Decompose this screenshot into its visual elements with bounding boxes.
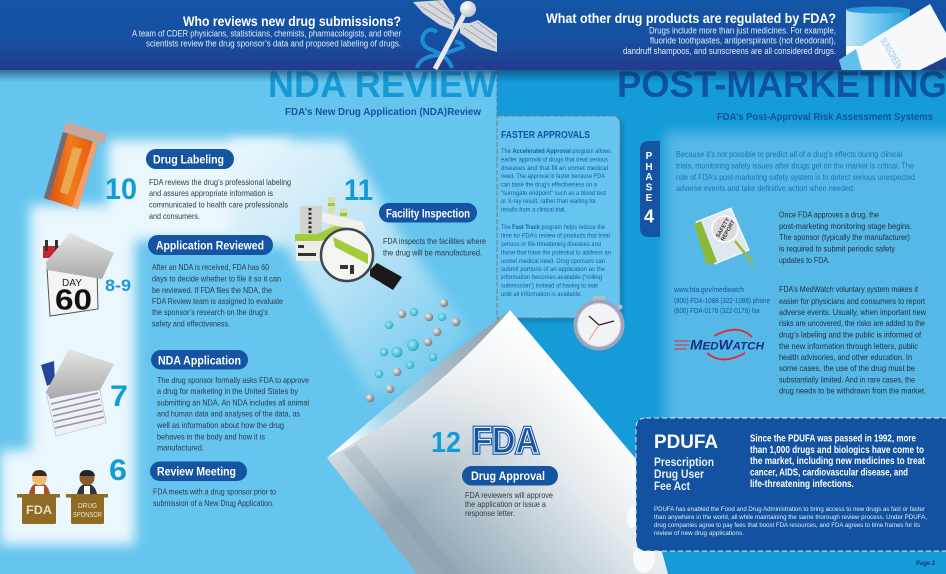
panel: post-marketing background (665, 132, 946, 432)
number 6: 6 (109, 454, 127, 487)
facility inspection text (383, 236, 486, 258)
PDUFA detail: review of new drug applications. (654, 530, 744, 537)
drug labeling pill (146, 149, 234, 169)
drug labeling text: FDA reviews the drug’s professional labeling (149, 177, 291, 187)
text: MedWatch description: easier for physicians and consumers to report (779, 296, 926, 306)
application reviewed text: the sponsor’s research on the drug’s (152, 307, 268, 317)
application reviewed text (152, 262, 283, 328)
drug approval text: FDA reviewers will approve (465, 490, 553, 500)
subheading: NDA review: FDA’s New Drug Application (NDA)Review (285, 107, 481, 118)
application reviewed text: safety and effectiveness. (152, 318, 230, 328)
PDUFA main statement: cancer, AIDS, cardiovascular disease, and (750, 468, 908, 478)
panel: faster approvals: time for FDA’s review of products that treat (501, 232, 610, 240)
icon: stopwatch (574, 296, 624, 350)
panel: faster approvals: submission”) instead of having to wait (501, 282, 598, 290)
icon: caduceus (413, 0, 497, 69)
panel: faster approvals: submit portions of an application as the (501, 266, 605, 273)
panel: faster approvals: those that have the potential to address an (501, 250, 611, 256)
icon: factory and magnifier (295, 197, 402, 290)
NDA application pill: NDA Application (158, 356, 241, 368)
panel: light beam (230, 140, 470, 395)
facility inspection text: the drug will be manufactured. (383, 248, 482, 258)
text: safety updates: Once FDA approves a drug, the (779, 210, 879, 220)
NDA application text (156, 375, 309, 452)
text: who reviews (132, 13, 401, 48)
application reviewed text: FDA Review team is assigned to evaluate (152, 296, 283, 306)
icon: day 60 calendar: 60 (55, 284, 92, 316)
text: MedWatch contact (673, 285, 770, 315)
text: page number: Page 2 (916, 560, 935, 567)
text: other products: dandruff shampoos, and sunscreens are all considered drugs. (623, 46, 836, 56)
section: phase 4 tab (640, 141, 660, 237)
application reviewed text: After an NDA is received, FDA has 60 (152, 262, 269, 272)
icon: FDA desk (17, 470, 60, 524)
review meeting text: submission of a New Drug Application. (153, 498, 274, 508)
NDA application text: behaves in the body and how it is (157, 432, 265, 442)
facility inspection pill: Facility Inspection (386, 208, 470, 220)
text: MedWatch description: the new information through letters, public (779, 341, 919, 351)
section: phase 4 tab: E (646, 193, 653, 204)
text: MedWatch description: health advisories, and other education. In (779, 352, 912, 362)
panel: faster approvals: FASTER APPROVALS (501, 129, 590, 141)
number 12: 12 (431, 427, 461, 459)
application reviewed pill (148, 235, 273, 255)
NDA application text: a drug for marketing in the United States by (157, 386, 299, 396)
section: step 11 facility inspection (295, 174, 486, 290)
icon: application form (41, 349, 114, 436)
drug labeling pill: Drug Labeling (153, 154, 224, 166)
heading: NDA REVIEW: NDA REVIEW (268, 64, 497, 105)
section: step 10 drug labeling (44, 122, 291, 221)
review meeting pill (150, 462, 247, 481)
PDUFA detail: than anywhere in the world, all while maintaining the same thorough review process. Under PDUFA, (654, 514, 927, 521)
section: phase 4 tab: 4 (644, 206, 654, 226)
drug approval text: response letter. (465, 508, 515, 518)
drug approval pill: Drug Approval (471, 471, 545, 483)
PDUFA main statement (750, 434, 926, 490)
text: MedWatch description (779, 284, 927, 396)
drug labeling text (149, 177, 291, 221)
panel: faster approvals: can base the drug’s effectiveness on a (501, 182, 597, 188)
panel: faster approvals: serious or life-threatening diseases and (501, 241, 601, 248)
number 11: 11 (344, 174, 373, 207)
text: MedWatch description: drug’s labeling and the public is informed of (779, 330, 922, 340)
text: safety updates: is required to submit periodic safety (779, 244, 896, 254)
icon: safety report: SAFETY (715, 217, 731, 239)
drug labeling text: communicated to health care professionals (149, 200, 288, 210)
text: other products (546, 10, 836, 56)
text: MedWatch description: drug needs to be withdrawn from the market. (779, 386, 926, 396)
review meeting text (153, 486, 276, 508)
text: MedWatch contact: www.fda.gov/medwatch (673, 285, 744, 294)
text: who reviews: Who reviews new drug submissions? (183, 13, 401, 29)
NDA application pill (151, 350, 248, 370)
panel: faster approvals (497, 70, 623, 321)
text: MedWatch contact: (800) FDA-0178 (322-0178) fax (674, 306, 760, 315)
section: phase 4 tab: S (646, 182, 653, 194)
panel: faster approvals: information becomes available (“rolling (501, 274, 602, 281)
text: safety updates: post-marketing monitoring stage begins. (779, 221, 912, 231)
panel: faster approvals: The Accelerated Approval program allows (501, 148, 612, 155)
section: step 12 drug approval (431, 420, 558, 518)
facility inspection pill (379, 203, 477, 222)
number 8-9: 8-9 (105, 276, 131, 295)
PDUFA main statement: life-threatening infections. (750, 479, 854, 490)
logo: MedWatch: MEDWATCH (690, 336, 765, 352)
panel: left glow column (0, 140, 290, 545)
section: step 6 review meeting (17, 454, 276, 524)
panel: faster approvals: unmet medical need. Drug sponsors can (501, 258, 605, 265)
panel: PDUFA (636, 418, 946, 551)
icon: sunscreen tube: SUNSCREEN (877, 36, 904, 71)
icon: day 60 calendar: DAY (62, 278, 82, 289)
drug approval text (465, 490, 553, 518)
panel: faster approvals: earlier approval of drugs that treat serious (501, 156, 609, 164)
text: MedWatch description: adverse events. Usually, when important new (779, 307, 927, 317)
number 10: 10 (105, 173, 137, 206)
PDUFA detail (654, 506, 927, 537)
panel: header band (0, 0, 946, 70)
drug labeling text: and assures appropriate information is (149, 188, 273, 198)
NDA application text: submitting an NDA. An NDA includes all animal (157, 398, 309, 408)
icon: drug sponsor desk: DRUG (78, 503, 97, 510)
icon: pill bottle (44, 122, 107, 209)
FDA logo: FDA (472, 420, 539, 461)
drug approval text: the application or issue a (465, 499, 546, 509)
icon: safety report (694, 208, 753, 265)
text: post-marketing intro: Because it’s not possible to predict all of a drug’s effects during clinical (676, 149, 902, 159)
icon: FDA desk: FDA (26, 503, 52, 517)
panel: faster approvals: need. The approval is faster because FDA (501, 173, 605, 180)
icon: falling dots (366, 299, 460, 402)
number 7: 7 (110, 380, 128, 413)
cup: large white cup (327, 310, 668, 574)
PDUFA full name: Prescription (654, 457, 714, 469)
panel: faster approvals: The Fast Track program helps reduce the (501, 224, 605, 231)
review meeting pill: Review Meeting (157, 466, 236, 478)
text: MedWatch contact: (800) FDA-1088 (322-1088) phone (674, 296, 770, 305)
icon: day 60 calendar (43, 233, 114, 316)
application reviewed text: days to decide whether to file it so it can (152, 274, 281, 284)
NDA application text: manufactured. (157, 442, 204, 452)
text: who reviews: A team of CDER physicians, statisticians, chemists, pharmacologists, and other (132, 28, 401, 38)
drug labeling text: and consumers. (149, 211, 200, 221)
facility inspection text: FDA inspects the facilities where (383, 236, 486, 246)
text: safety updates: updates to FDA. (779, 255, 830, 265)
section: step 7 NDA application (41, 349, 309, 452)
NDA application text: The drug sponsor formally asks FDA to approve (157, 375, 309, 385)
PDUFA full name: Fee Act (654, 481, 690, 493)
logo: MedWatch (674, 330, 765, 360)
text: other products: What other drug products are regulated by FDA? (546, 10, 836, 26)
text: post-marketing intro (676, 149, 915, 193)
NDA application text: well as information about how the drug (156, 420, 284, 430)
application reviewed pill: Application Reviewed (156, 240, 264, 252)
NDA application text: and human data and analyses of the data, as (157, 408, 300, 418)
section: phase 4 tab: A (645, 172, 653, 183)
text: MedWatch description: FDA’s MedWatch voluntary system makes it (779, 284, 919, 294)
text: other products: fluoride toothpastes, antiperspirants (not deodorant), (650, 36, 836, 46)
icon: safety report: REPORT (720, 219, 737, 242)
review meeting text: FDA meets with a drug sponsor prior to (153, 486, 276, 496)
text: who reviews: scientists review the drug sponsor’s data and proposed labeling of drugs. (146, 38, 401, 48)
panel: faster approvals: diseases and that fill an unmet medical (501, 165, 608, 172)
heading: POST-MARKETING: POST-MARKETING (617, 64, 946, 105)
PDUFA title: PDUFA (654, 432, 718, 453)
text: safety updates: The sponsor (typically the manufacturer) (779, 232, 910, 242)
section: phase 4 tab: H (645, 162, 653, 173)
section: phase 4 tab: P (646, 151, 653, 162)
text: post-marketing intro: adverse events and take definitive action when needed. (676, 183, 855, 193)
text: safety updates (779, 210, 912, 265)
panel: faster approvals: results from a clinical trial. (501, 206, 566, 214)
text: MedWatch description: some cases, the use of the drug must be (779, 363, 915, 373)
panel: faster approvals: “surrogate endpoint” such as a blood test (501, 190, 606, 197)
icon: drug sponsor desk: SPONSOR (73, 512, 102, 519)
PDUFA full name (654, 457, 714, 493)
panel: faster approvals: until all information is available. (501, 291, 582, 298)
text: MedWatch description: substantially limited. And in rare cases, the (779, 374, 915, 384)
header shadow (0, 70, 946, 82)
FDA logo: FDA (472, 420, 539, 461)
icon: sunscreen tube (839, 4, 946, 71)
section: step 8-9 application reviewed (43, 233, 283, 328)
PDUFA detail: drug companies agree to pay fees that boost FDA resources, and FDA agrees to time frames for its (654, 522, 921, 529)
panel: faster approvals: or X-ray result, rather than waiting for (501, 198, 597, 205)
application reviewed text: be reviewed. If FDA files the NDA, the (152, 285, 272, 295)
text: other products: Drugs include more than just medicines. For example, (649, 26, 836, 36)
PDUFA full name: Drug User (654, 469, 704, 481)
icon: drug sponsor desk (66, 470, 108, 524)
